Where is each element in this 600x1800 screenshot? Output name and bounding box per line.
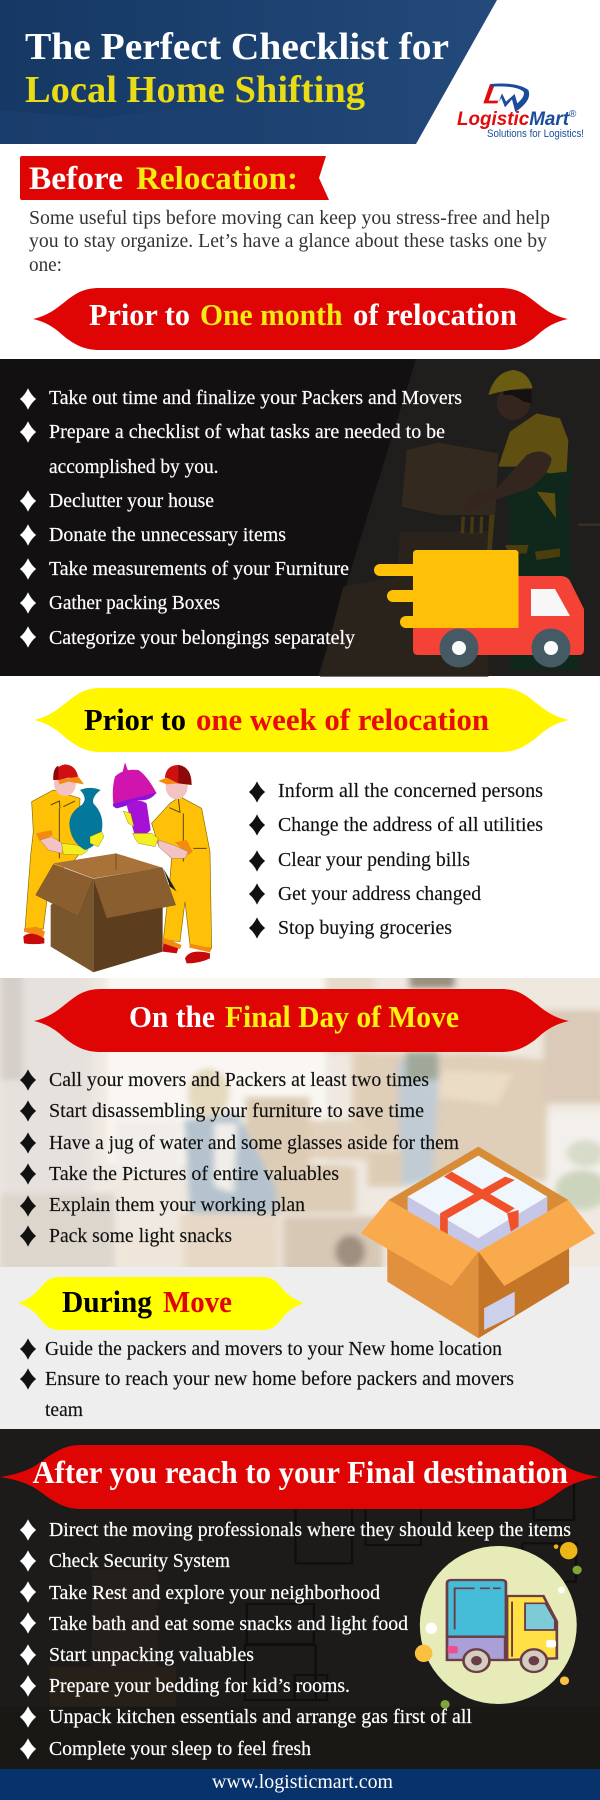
panel: during move <box>0 1267 600 1429</box>
checklist: Complete your sleep to feel fresh <box>49 1738 311 1760</box>
heading: Before Relocation: Before <box>29 161 123 197</box>
right worker <box>152 765 212 963</box>
heading: Before Relocation: Relocation: <box>136 161 298 197</box>
checklist: Prepare a checklist of what tasks are needed to be <box>49 421 445 443</box>
photo: dark room <box>0 1480 600 1773</box>
title: Local Home Shifting <box>25 69 365 111</box>
checklist: one week: Stop buying groceries <box>278 917 452 939</box>
checklist: one week: Get your address changed <box>278 883 481 905</box>
logo: ® <box>569 109 577 120</box>
intro text: one: <box>29 255 62 276</box>
logo: LogisticMart <box>457 109 570 130</box>
ribbon: prior to one week: Prior to <box>84 702 186 737</box>
checklist: Ensure to reach your new home before packers and movers <box>45 1368 514 1390</box>
logo <box>457 83 584 140</box>
footer: website <box>0 1769 600 1800</box>
illustration: two movers packing a box <box>23 762 212 972</box>
checklist: Unpack kitchen essentials and arrange gas first of all <box>49 1706 472 1728</box>
ribbon: prior to one month: One month <box>200 297 342 332</box>
heading: Before Relocation <box>20 156 329 200</box>
title <box>25 26 449 111</box>
ribbon: final destination <box>0 1445 600 1509</box>
ribbon: prior to one month: of relocation <box>353 297 517 332</box>
ribbon: final day: Final Day of Move <box>225 999 459 1034</box>
checklist: Categorize your belongings separately <box>49 627 355 649</box>
checklist: Take the Pictures of entire valuables <box>49 1163 339 1185</box>
panel: final day <box>0 967 600 1277</box>
cardboard box <box>36 853 177 972</box>
intro text <box>29 208 550 276</box>
checklist: Take out time and finalize your Packers and Movers <box>49 387 462 409</box>
checklist <box>20 387 462 649</box>
checklist: Donate the unnecessary items <box>49 524 286 546</box>
checklist: accomplished by you. <box>49 456 218 478</box>
icon: open parcel box <box>361 1147 595 1338</box>
intro text: you to stay organize. Let’s have a glance about these tasks one by <box>29 231 547 252</box>
vase <box>69 788 102 850</box>
footer: website: www.logisticmart.com <box>212 1771 393 1793</box>
checklist: Start unpacking valuables <box>49 1644 254 1666</box>
ribbon: final day: On the <box>129 999 215 1034</box>
checklist: Start disassembling your furniture to save time <box>49 1100 424 1122</box>
checklist: one week <box>249 780 543 939</box>
ribbon: prior to one month <box>33 288 568 350</box>
ribbon: prior to one week: one week of relocation <box>196 702 489 737</box>
panel: one month checklist <box>0 359 600 677</box>
checklist: Have a jug of water and some glasses aside for them <box>49 1132 459 1154</box>
ribbon: final destination: After you reach to your Final destination <box>32 1454 568 1490</box>
ribbon: prior to one month: Prior to <box>89 297 190 332</box>
checklist: Gather packing Boxes <box>49 592 220 614</box>
panel: after you reach <box>0 1429 600 1773</box>
checklist: Declutter your house <box>49 490 214 512</box>
checklist <box>20 1069 459 1247</box>
ribbon: during move <box>18 1277 304 1330</box>
left worker <box>23 764 88 944</box>
checklist: one week: Change the address of all utilities <box>278 814 543 836</box>
checklist: Check Security System <box>49 1550 230 1572</box>
checklist: Prepare your bedding for kid’s rooms. <box>49 1675 350 1697</box>
panel: header <box>0 0 584 144</box>
logo: Solutions for Logistics! <box>487 128 584 140</box>
checklist <box>20 1519 571 1760</box>
checklist: Explain them your working plan <box>49 1194 305 1216</box>
checklist: Take Rest and explore your neighborhood <box>49 1582 380 1604</box>
ribbon: final day <box>34 989 569 1052</box>
ribbon: during move: During <box>62 1284 152 1319</box>
photo: couple packing <box>0 967 600 1277</box>
icon: truck in circle <box>415 1542 582 1709</box>
lamp <box>90 762 158 847</box>
checklist <box>20 1338 514 1421</box>
checklist: Call your movers and Packers at least two times <box>49 1069 429 1091</box>
checklist: one week: Inform all the concerned persons <box>278 780 543 802</box>
ribbon: prior to one week <box>34 688 569 752</box>
checklist: Take measurements of your Furniture <box>49 558 349 580</box>
icon: delivery truck <box>374 550 584 668</box>
checklist: Guide the packers and movers to your New home location <box>45 1338 502 1360</box>
checklist: one week: Clear your pending bills <box>278 849 470 871</box>
photo: mover carrying box <box>320 370 600 677</box>
intro text: Some useful tips before moving can keep you stress-free and help <box>29 208 550 229</box>
checklist: team <box>45 1399 83 1421</box>
checklist: Direct the moving professionals where they should keep the items <box>49 1519 571 1541</box>
ribbon: during move: Move <box>163 1284 232 1319</box>
checklist: Take bath and eat some snacks and light food <box>49 1613 408 1635</box>
title: The Perfect Checklist for <box>25 26 449 68</box>
checklist: Pack some light snacks <box>49 1225 232 1247</box>
